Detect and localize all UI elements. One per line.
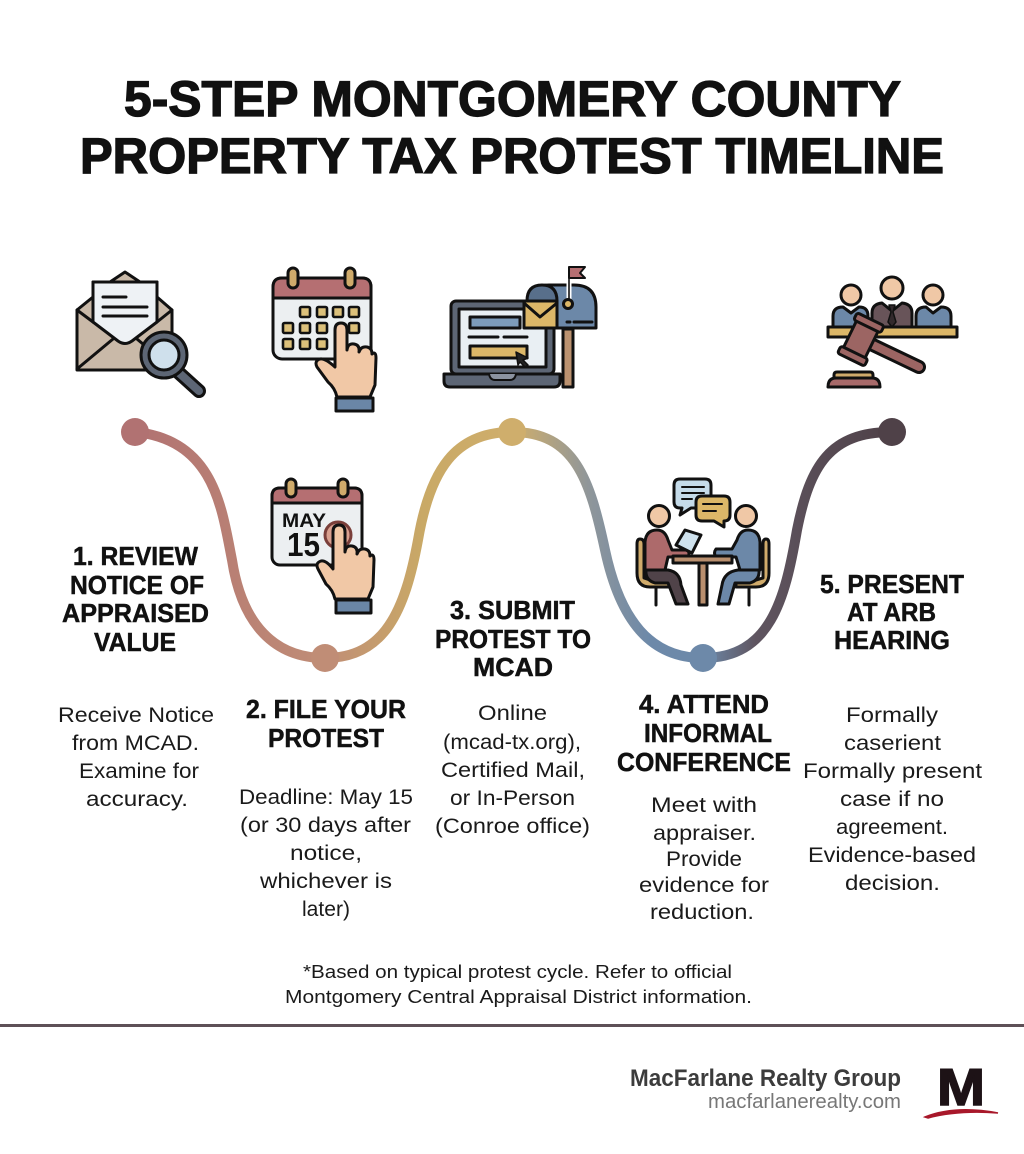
heading: step 4 [617,689,791,777]
icon: laptop and mailbox [444,267,596,387]
logo: MacFarlane M: M [937,1059,985,1117]
heading: step 5: 5. PRESENT [820,569,964,599]
node: step 3 [498,418,526,446]
text: step 3 description: (Conroe office) [435,814,590,838]
logo: MacFarlane M [925,1059,998,1118]
text: step 5 description: case if no [840,787,944,811]
text: step 2 description: notice, [290,841,362,865]
heading: step 3: MCAD [473,652,553,682]
text: step 2 description: later) [302,897,350,921]
text: step 2 description [239,785,413,921]
heading: step 3 [435,595,591,682]
text: step 4 description: Provide [666,847,742,871]
heading: step 4: 4. ATTEND [639,689,769,719]
text: step 2 description: Deadline: May 15 [239,785,413,809]
footnote [285,962,752,1007]
timeline curve [121,418,906,672]
text: step 1 description: Examine for [79,759,199,783]
icon: calendar May 15 with hand: MAY [282,511,326,532]
footer brand text: macfarlanerealty.com [708,1091,901,1113]
heading: step 3: PROTEST TO [435,624,591,654]
icon: informal conference meeting [637,479,769,605]
text: step 1 description [58,703,214,811]
footnote: *Based on typical protest cycle. Refer to official [303,962,732,982]
node: step 1 [121,418,149,446]
heading: step 5: AT ARB [847,597,936,627]
text: step 2 description: whichever is [259,869,392,893]
text: step 3 description [435,701,590,838]
footnote: Montgomery Central Appraisal District information. [285,987,752,1007]
text: step 4 description: Meet with [651,793,757,817]
heading: step 1: NOTICE OF [70,570,204,600]
footer brand text [630,1065,901,1113]
node: step 2 [311,644,339,672]
text: step 4 description [639,793,769,924]
text: step 3 description: (mcad-tx.org), [443,730,581,754]
text: step 3 description: or In-Person [450,786,575,810]
heading: step 5: HEARING [834,625,950,655]
text: step 5 description: Formally present [803,759,982,783]
step 3: submit protest to MCAD [435,595,591,838]
text: step 4 description: reduction. [650,900,754,924]
text: step 1 description: Receive Notice [58,703,214,727]
title [80,71,944,184]
heading: step 4: CONFERENCE [617,747,791,777]
heading: step 5 [820,569,964,655]
text: step 5 description: caserient [844,731,941,755]
heading: step 1: 1. REVIEW [73,541,198,571]
text: step 5 description: Evidence-based [808,843,976,867]
step 1: review notice of appraised value [58,541,214,811]
node: step 5 [878,418,906,446]
footer brand text: MacFarlane Realty Group [630,1065,901,1092]
text: step 5 description: decision. [845,871,940,895]
icon: envelope with magnifying glass [77,272,199,391]
title: PROPERTY TAX PROTEST TIMELINE [80,128,944,184]
icon: calendar May 15 with hand: 15 [287,526,320,563]
icon: calendar with pointing hand [273,268,376,411]
heading: step 3: 3. SUBMIT [450,595,575,625]
text: step 3 description: Online [478,701,547,725]
heading: step 2: 2. FILE YOUR [246,694,406,724]
node: step 4 [689,644,717,672]
heading: step 2 [246,694,406,753]
text: step 1 description: accuracy. [86,787,188,811]
step 4: attend informal conference [617,689,791,924]
icon: calendar May 15 with hand [272,479,374,613]
step 2: file your protest [239,694,413,921]
heading: step 2: PROTEST [268,723,384,753]
heading: step 1: APPRAISED [62,598,209,628]
heading: step 4: INFORMAL [644,718,772,748]
text: step 4 description: evidence for [639,873,769,897]
step 5: present at ARB hearing [803,569,982,895]
text: step 5 description: agreement. [836,815,948,839]
text: step 4 description: appraiser. [653,821,756,845]
text: step 1 description: from MCAD. [72,731,199,755]
text: step 5 description [803,703,982,895]
heading: step 1: VALUE [94,627,176,657]
text: step 3 description: Certified Mail, [441,758,585,782]
text: step 2 description: (or 30 days after [240,813,411,837]
icon: judges with gavel [828,277,957,387]
title: 5-STEP MONTGOMERY COUNTY [124,71,901,127]
text: step 5 description: Formally [846,703,938,727]
heading: step 1 [62,541,209,657]
